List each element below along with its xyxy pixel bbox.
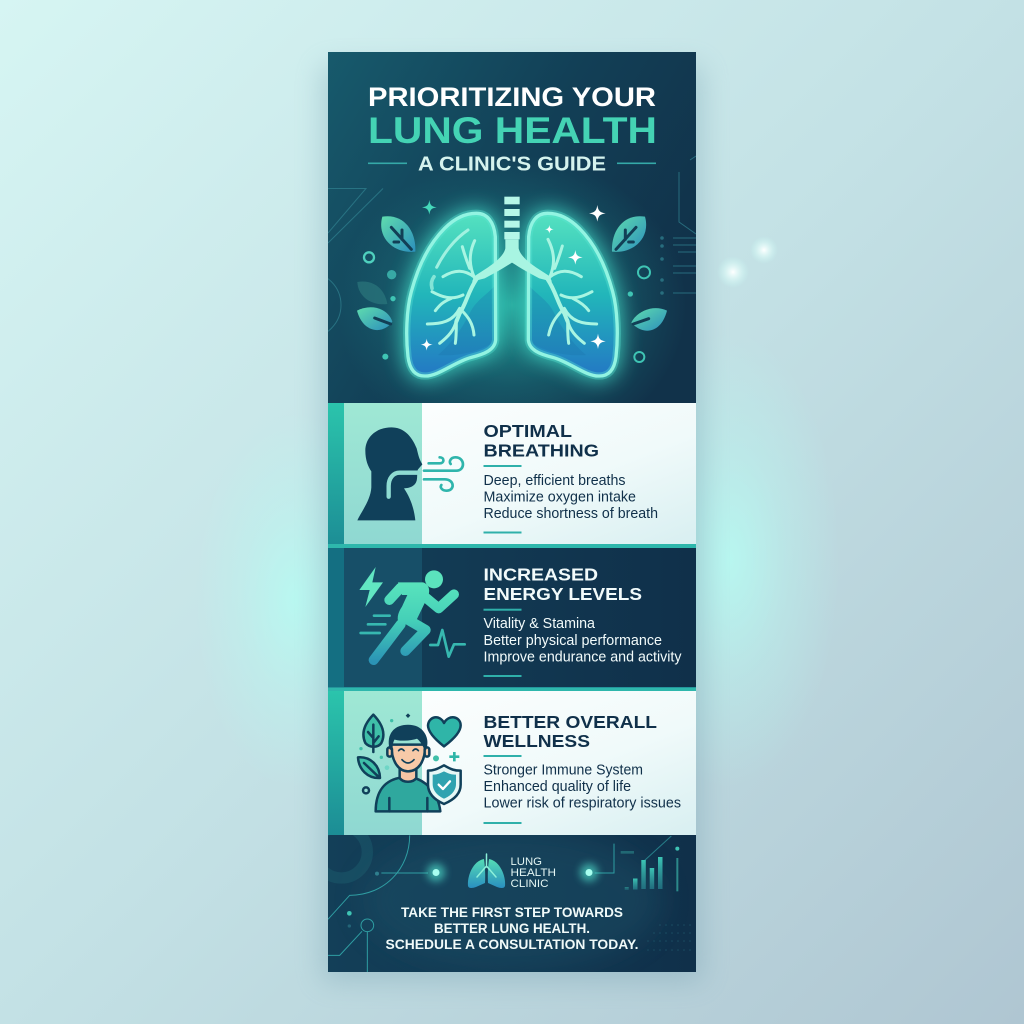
- poster: [328, 52, 696, 972]
- call to action: TAKE THE FIRST STEP TOWARDS: [401, 905, 623, 920]
- text: better wellness: Lower risk of respiratory issues: [484, 796, 681, 812]
- title: [368, 87, 656, 170]
- wind lines: [424, 457, 463, 491]
- icon: person with heart and shield: [358, 713, 461, 811]
- dot texture: [647, 924, 691, 951]
- call to action: SCHEDULE A CONSULTATION TODAY.: [386, 937, 638, 952]
- logo text: HEALTH: [510, 867, 556, 879]
- panel: better wellness: [328, 688, 696, 835]
- text: increased energy: INCREASED: [484, 565, 598, 585]
- title: PRIORITIZING YOUR: [368, 82, 656, 112]
- text: better wellness: [484, 712, 681, 824]
- icon: head breathing: [357, 427, 463, 520]
- circuit decoration: hero: [328, 156, 696, 332]
- left lung: [407, 213, 496, 376]
- text: increased energy: Vitality & Stamina: [484, 616, 596, 632]
- panel: increased energy: [328, 545, 696, 689]
- text: optimal breathing: OPTIMAL: [484, 421, 572, 441]
- text: better wellness: WELLNESS: [484, 731, 590, 751]
- circuit decoration: footer: [328, 835, 680, 972]
- call to action: BETTER LUNG HEALTH.: [434, 921, 590, 936]
- glowing nodes: [427, 864, 598, 882]
- logo text: CLINIC: [510, 878, 549, 890]
- icon: runner: [359, 567, 465, 660]
- bar chart: [625, 857, 662, 890]
- title: A CLINIC'S GUIDE: [418, 152, 606, 176]
- panel: optimal breathing: [328, 403, 696, 548]
- text: optimal breathing: Reduce shortness of breath: [484, 506, 658, 522]
- panel: footer: [328, 835, 696, 972]
- trachea rings: [504, 197, 520, 239]
- text: increased energy: ENERGY LEVELS: [484, 584, 642, 604]
- text: optimal breathing: BREATHING: [484, 441, 599, 461]
- leaves: [357, 216, 667, 331]
- panel: hero: [328, 52, 696, 403]
- logo text: [511, 858, 556, 887]
- text: increased energy: Better physical performance: [484, 633, 662, 649]
- dots and rings: [364, 252, 650, 362]
- logo: lungs: [468, 854, 505, 888]
- text: increased energy: [484, 565, 682, 677]
- trachea and bronchi: [427, 239, 597, 343]
- text: increased energy: Improve endurance and activity: [484, 650, 682, 666]
- sparkles: [421, 200, 606, 351]
- illustration: lungs: [357, 197, 667, 376]
- text: optimal breathing: [484, 421, 658, 534]
- text: optimal breathing: Maximize oxygen intake: [484, 490, 636, 506]
- call to action: [386, 908, 638, 949]
- text: better wellness: Enhanced quality of life: [484, 779, 631, 795]
- text: optimal breathing: Deep, efficient breaths: [484, 473, 626, 489]
- right lung: [528, 213, 617, 376]
- title: LUNG HEALTH: [368, 110, 657, 151]
- logo text: LUNG: [510, 856, 542, 868]
- text: better wellness: Stronger Immune System: [484, 763, 643, 779]
- text: better wellness: BETTER OVERALL: [484, 712, 657, 732]
